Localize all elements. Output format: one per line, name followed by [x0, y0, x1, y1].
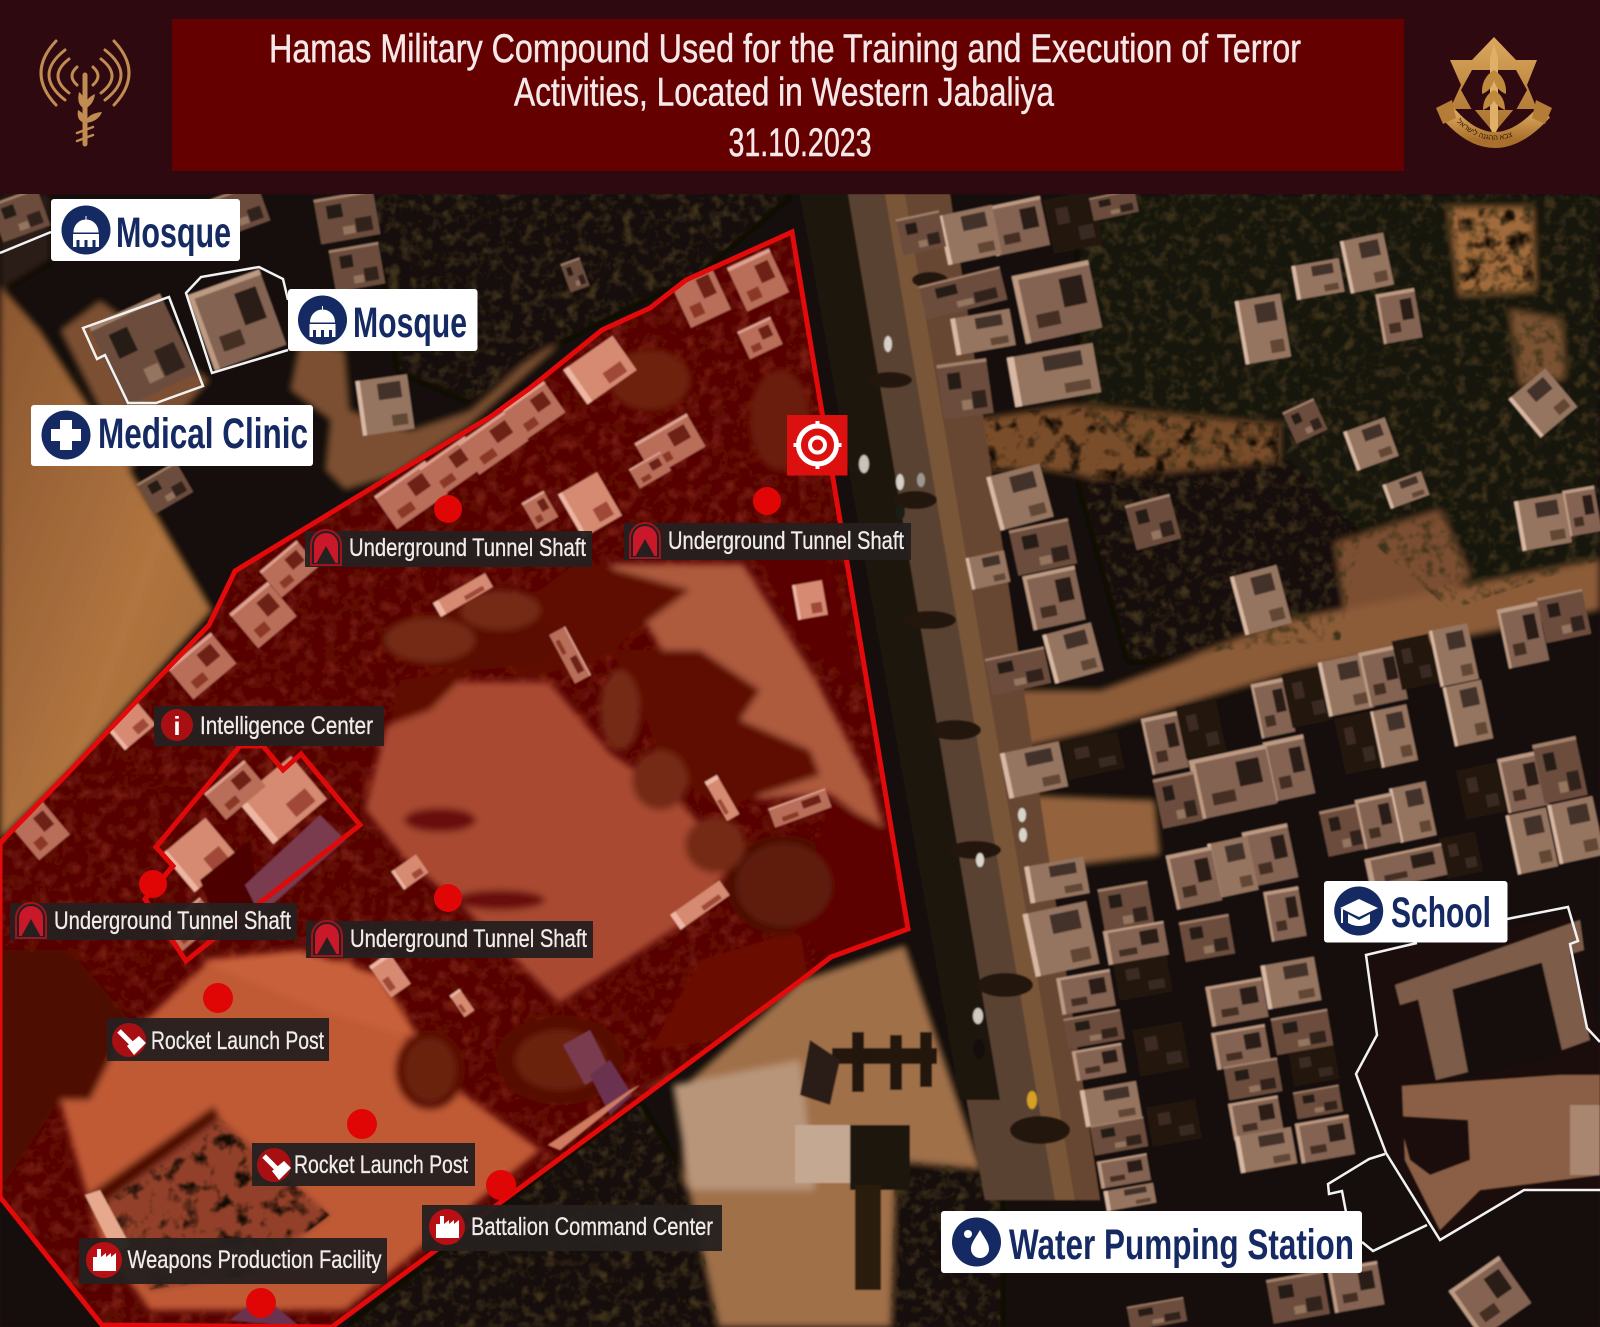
label: mosque 1	[51, 199, 240, 261]
label: intelligence center: Intelligence Center	[200, 712, 373, 740]
south lot structures	[795, 1032, 937, 1290]
label: underground tunnel shaft 1: Underground Tunnel Shaft	[349, 534, 586, 562]
label: water pumping station: Water Pumping Station	[1009, 1221, 1354, 1269]
icon: medical cross	[42, 410, 90, 460]
icon: tunnel	[16, 903, 46, 938]
compound buildings	[374, 461, 448, 529]
label: underground tunnel shaft 2: Underground Tunnel Shaft	[668, 527, 904, 555]
vegetation texture	[350, 194, 1600, 1327]
icon: mosque dome	[298, 296, 347, 344]
white outline: school	[1507, 907, 1600, 1042]
buildings right of road	[896, 189, 1600, 1327]
icon: water drop	[952, 1218, 1001, 1266]
icon: IDF emblem	[1436, 37, 1552, 148]
label: medical clinic	[31, 405, 313, 466]
icon: tunnel	[312, 921, 342, 956]
title	[269, 27, 1301, 165]
compound zone border	[0, 232, 908, 1327]
label: rocket launch post 2	[252, 1143, 475, 1186]
label: rocket launch post 2: Rocket Launch Post	[294, 1151, 468, 1179]
compound zone interior	[0, 220, 920, 1327]
icon: spokesperson emblem	[41, 41, 129, 144]
title panel	[172, 19, 1404, 171]
label: water pumping station	[941, 1211, 1362, 1273]
label: mosque 2	[288, 289, 478, 351]
label: mosque 2: Mosque	[353, 299, 467, 347]
label: school: School	[1391, 889, 1491, 937]
icon: mosque dome	[62, 206, 110, 254]
south lot	[680, 945, 1000, 1327]
icon: graduation cap	[1334, 886, 1383, 936]
marker dots	[139, 487, 781, 1318]
intelligence center outline	[145, 746, 360, 961]
buildings left of compound	[0, 183, 590, 514]
label: weapons production facility	[79, 1238, 387, 1284]
label: medical clinic: Medical Clinic	[98, 410, 308, 458]
tree canopies	[385, 618, 475, 662]
main road	[800, 194, 1100, 1200]
label: underground tunnel shaft 2	[624, 523, 911, 560]
white outline: school south	[1356, 943, 1600, 1240]
icon: rocket	[112, 1023, 146, 1057]
label: underground tunnel shaft 4: Underground Tunnel Shaft	[350, 925, 587, 953]
label: rocket launch post 1	[107, 1018, 329, 1061]
label: mosque 1: Mosque	[116, 209, 231, 257]
school compound ground and blocks	[1356, 915, 1600, 1240]
intelligence building roofs	[162, 818, 238, 892]
icon: information	[161, 709, 193, 741]
icon: factory	[86, 1242, 122, 1278]
label: battalion command center	[422, 1205, 722, 1251]
cars on road	[859, 336, 1037, 1109]
icon: tunnel	[311, 530, 341, 565]
icon: tunnel	[630, 523, 660, 558]
title: Activities, Located in Western Jabaliya	[514, 70, 1055, 114]
header band	[0, 0, 1600, 194]
title: 31.10.2023	[728, 121, 872, 165]
icon: factory	[429, 1209, 465, 1245]
icon: information: i	[173, 711, 181, 741]
white outline: mosques	[0, 232, 288, 403]
label: intelligence center	[154, 706, 384, 746]
tree shadows	[610, 650, 820, 810]
icon: IDF emblem: צבא ההגנה לישראל	[1457, 118, 1512, 140]
label: school	[1324, 881, 1508, 942]
label: underground tunnel shaft 3: Underground Tunnel Shaft	[54, 907, 291, 935]
label: rocket launch post 1: Rocket Launch Post	[151, 1027, 324, 1055]
label: underground tunnel shaft 1	[305, 530, 592, 567]
icon: rocket	[257, 1148, 291, 1182]
label: weapons production facility: Weapons Production Facility	[128, 1246, 382, 1274]
title: Hamas Military Compound Used for the Training and Execution of Terror	[269, 27, 1301, 71]
label: underground tunnel shaft 4	[306, 921, 593, 958]
target icon	[787, 415, 848, 476]
label: underground tunnel shaft 3	[10, 903, 297, 940]
label: battalion command center: Battalion Command Center	[471, 1213, 713, 1241]
white outline: water pumping station	[1328, 1154, 1427, 1251]
